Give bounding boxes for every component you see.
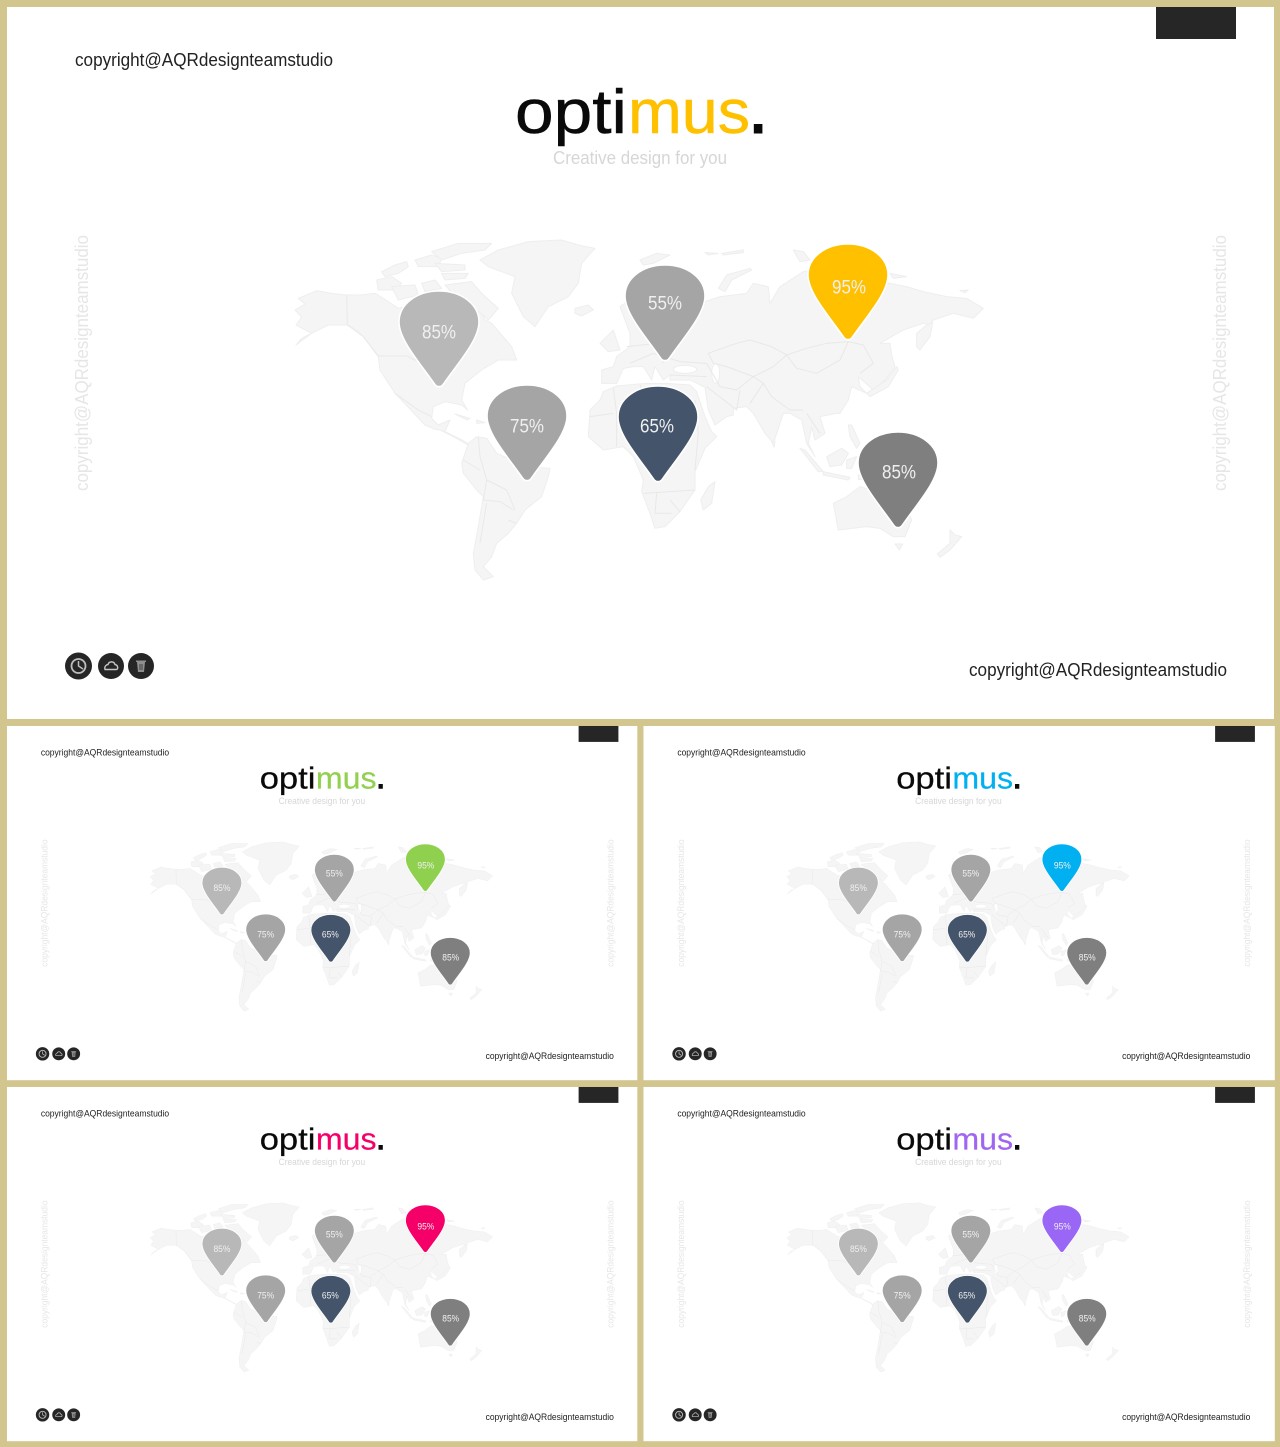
black tab: [1156, 7, 1236, 39]
vertical watermark right: copyright@AQRdesignteamstudio: [1210, 235, 1230, 491]
pin: Russia 95%: 95%: [832, 278, 866, 298]
pin: Russia 95%: [808, 244, 888, 340]
pin: North America 85%: [839, 867, 878, 915]
pin: Europe 55%: [951, 1215, 991, 1263]
logo title: opti: [260, 1122, 315, 1157]
pin: Australia 85%: [430, 937, 470, 985]
copyright top: copyright@AQRdesignteamstudio: [677, 747, 806, 757]
pin: Europe 55%: 55%: [326, 1229, 343, 1240]
pin: Russia 95%: [1042, 844, 1082, 891]
pin: Africa 65%: 65%: [958, 1291, 976, 1302]
icon row: [36, 1047, 80, 1061]
logo title: [515, 61, 769, 150]
world map: [295, 240, 983, 580]
logo title: opti: [896, 761, 952, 796]
vertical watermark left: copyright@AQRdesignteamstudio: [676, 839, 686, 967]
logo title: mus: [316, 1122, 377, 1157]
copyright top: copyright@AQRdesignteamstudio: [75, 50, 333, 70]
pin: Australia 85%: 85%: [442, 1314, 460, 1325]
icon row: [672, 1408, 717, 1422]
vertical watermark left: copyright@AQRdesignteamstudio: [39, 839, 49, 967]
logo title: .: [375, 754, 386, 798]
pin: Australia 85%: 85%: [442, 953, 460, 964]
logo title: mus: [952, 1122, 1013, 1157]
pin: Africa 65%: [947, 1276, 987, 1323]
pin: Africa 65%: 65%: [322, 930, 339, 941]
copyright top: copyright@AQRdesignteamstudio: [677, 1108, 806, 1118]
panel: pink slide: [7, 1087, 637, 1441]
icon row: [672, 1047, 717, 1061]
logo title: [260, 1115, 386, 1159]
pin: Europe 55%: 55%: [962, 1229, 980, 1240]
pin: Europe 55%: [951, 854, 991, 902]
logo title: opti: [896, 1122, 952, 1157]
pin: North America 85%: 85%: [850, 883, 867, 894]
copyright bottom: copyright@AQRdesignteamstudio: [486, 1051, 614, 1061]
panel: blue slide: [643, 726, 1275, 1080]
pin: Europe 55%: 55%: [326, 868, 343, 879]
pin: Russia 95%: 95%: [417, 861, 435, 872]
pin: South America 75%: 75%: [894, 930, 911, 941]
pin: Australia 85%: 85%: [1079, 1314, 1096, 1325]
pin: South America 75%: [246, 914, 286, 962]
pin: Europe 55%: [314, 1215, 354, 1263]
logo title: [260, 754, 386, 798]
tagline: Creative design for you: [279, 1157, 365, 1167]
pin: Europe 55%: 55%: [648, 294, 682, 314]
tagline: Creative design for you: [279, 796, 365, 806]
pin: South America 75%: 75%: [257, 930, 275, 941]
pin: Australia 85%: [858, 432, 938, 528]
copyright bottom: copyright@AQRdesignteamstudio: [969, 660, 1227, 680]
pin: South America 75%: [882, 1275, 922, 1323]
world map: [150, 842, 493, 1011]
pin: Australia 85%: 85%: [1079, 953, 1096, 964]
pin: Australia 85%: [430, 1298, 470, 1346]
logo title: .: [747, 61, 769, 150]
panel: main slide yellow: [7, 7, 1274, 719]
pin: Australia 85%: [1067, 1298, 1107, 1346]
pin: South America 75%: [487, 385, 567, 481]
logo title: .: [1012, 754, 1023, 798]
pin: Russia 95%: 95%: [1054, 861, 1071, 872]
copyright bottom: copyright@AQRdesignteamstudio: [486, 1412, 614, 1422]
pin: North America 85%: 85%: [850, 1244, 867, 1255]
copyright bottom: copyright@AQRdesignteamstudio: [1122, 1412, 1250, 1422]
pin: Africa 65%: [618, 386, 698, 482]
black tab: [1215, 726, 1255, 742]
icon row: [36, 1408, 80, 1422]
vertical watermark right: copyright@AQRdesignteamstudio: [605, 839, 615, 967]
logo title: opti: [260, 761, 315, 796]
tagline: Creative design for you: [915, 1157, 1002, 1167]
pin: South America 75%: [246, 1275, 286, 1323]
logo title: [896, 1115, 1023, 1159]
vertical watermark right: copyright@AQRdesignteamstudio: [605, 1200, 615, 1328]
pin: Australia 85%: [1067, 937, 1107, 985]
pin: North America 85%: [399, 291, 479, 387]
copyright top: copyright@AQRdesignteamstudio: [41, 1108, 169, 1118]
world map: [787, 842, 1129, 1011]
vertical watermark left: copyright@AQRdesignteamstudio: [39, 1200, 49, 1328]
logo title: mus: [316, 761, 377, 796]
pin: Africa 65%: 65%: [958, 930, 976, 941]
vertical watermark right: copyright@AQRdesignteamstudio: [1242, 839, 1252, 967]
tagline: Creative design for you: [553, 148, 727, 168]
pin: Africa 65%: 65%: [640, 416, 674, 438]
vertical watermark left: copyright@AQRdesignteamstudio: [72, 235, 92, 491]
icon row: [65, 652, 154, 680]
panel: green slide: [7, 726, 637, 1080]
pin: Russia 95%: 95%: [1054, 1222, 1071, 1233]
pin: Africa 65%: [311, 1276, 351, 1323]
pin: South America 75%: 75%: [257, 1291, 275, 1302]
pin: Europe 55%: [625, 265, 705, 361]
pin: South America 75%: 75%: [510, 416, 544, 438]
pin: Russia 95%: [405, 1205, 445, 1252]
vertical watermark left: copyright@AQRdesignteamstudio: [676, 1200, 686, 1328]
pin: South America 75%: [882, 914, 922, 962]
world map: [150, 1203, 493, 1372]
pin: Europe 55%: 55%: [962, 868, 980, 879]
pin: North America 85%: [202, 1228, 242, 1276]
black tab: [1215, 1087, 1255, 1103]
pin: North America 85%: [202, 867, 242, 915]
pin: Russia 95%: [1042, 1205, 1082, 1252]
pin: Australia 85%: 85%: [882, 462, 916, 484]
pin: Africa 65%: 65%: [322, 1291, 339, 1302]
world map: [787, 1203, 1129, 1372]
vertical watermark right: copyright@AQRdesignteamstudio: [1242, 1200, 1252, 1328]
pin: North America 85%: [839, 1228, 878, 1276]
logo title: opti: [515, 78, 627, 147]
logo title: .: [375, 1115, 386, 1159]
logo title: [896, 754, 1023, 798]
black tab: [579, 726, 618, 742]
copyright bottom: copyright@AQRdesignteamstudio: [1122, 1051, 1250, 1061]
pin: Africa 65%: [947, 915, 987, 962]
logo title: mus: [628, 78, 750, 147]
panel: purple slide: [643, 1087, 1275, 1441]
pin: Europe 55%: [314, 854, 354, 902]
logo title: mus: [952, 761, 1013, 796]
pin: South America 75%: 75%: [894, 1291, 911, 1302]
pin: North America 85%: 85%: [213, 883, 231, 894]
pin: North America 85%: 85%: [213, 1244, 231, 1255]
pin: Africa 65%: [311, 915, 351, 962]
copyright top: copyright@AQRdesignteamstudio: [41, 747, 169, 757]
tagline: Creative design for you: [915, 796, 1002, 806]
logo title: .: [1012, 1115, 1023, 1159]
black tab: [579, 1087, 618, 1103]
pin: North America 85%: 85%: [422, 322, 456, 344]
pin: Russia 95%: [405, 844, 445, 891]
pin: Russia 95%: 95%: [417, 1222, 435, 1233]
